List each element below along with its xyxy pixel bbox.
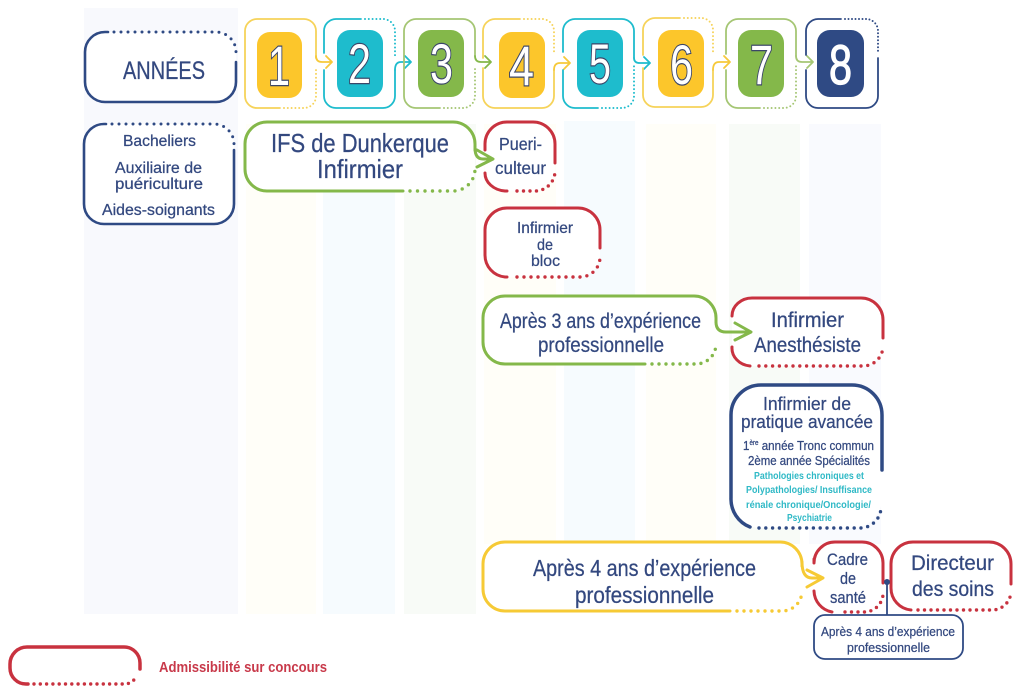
- panel: entry profiles: Bacheliers: [123, 133, 196, 150]
- panel: year 6: 6: [670, 33, 693, 96]
- arrow: year 3 to 4: [475, 56, 491, 68]
- arrow: après 4 ans to cadre de santé: [802, 562, 823, 587]
- legend: [10, 647, 327, 684]
- panel: infirmier de pratique avancée: [731, 385, 882, 528]
- panel: infirmier de pratique avancée: Polypathologies/ Insuffisance: [746, 484, 872, 496]
- arrow: year 1 to 2: [316, 56, 332, 68]
- panel: cadre de santé: de: [840, 569, 856, 588]
- panel: infirmier de pratique avancée: rénale chronique/Oncologie/: [746, 499, 871, 511]
- panel: IFS de Dunkerque: Infirmier: [317, 154, 403, 184]
- panel: year 2: 2: [348, 32, 371, 95]
- panel: après 3 ans: Après 3 ans d’expérience: [500, 310, 701, 333]
- panel: year 3: 3: [430, 32, 453, 95]
- panel: après 3 ans: [483, 296, 716, 364]
- panel: après 4 ans condition: professionnelle: [847, 640, 930, 655]
- panel: year 5: [563, 19, 634, 108]
- background column bands: [84, 8, 881, 614]
- panel: year 1: [245, 19, 316, 108]
- panel: après 4 ans: Après 4 ans d’expérience: [533, 555, 756, 581]
- panel: year 4: 4: [509, 34, 534, 97]
- panel: après 4 ans condition: [814, 615, 963, 659]
- panel: infirmier de pratique avancée: année Tronc commun: [758, 438, 874, 453]
- panel: entry profiles: puériculture: [115, 176, 203, 193]
- panel: infirmier de bloc: de: [537, 237, 553, 254]
- panel: entry profiles: Aides-soignants: [102, 202, 215, 219]
- panel: directeur des soins: Directeur: [911, 551, 994, 575]
- panel: puériculteur: Pueri-: [499, 134, 542, 154]
- panel: year 6: [643, 18, 713, 107]
- panel: cadre de santé: santé: [830, 588, 866, 607]
- panel: années label: [85, 32, 236, 102]
- panel: directeur des soins: des soins: [912, 577, 994, 601]
- arrow: year 5 to 6: [634, 57, 650, 69]
- legend swatch: [10, 647, 140, 684]
- panel: IFS de Dunkerque: IFS de Dunkerque: [271, 128, 449, 158]
- connector: cadre to condition: [884, 579, 890, 616]
- panel: infirmier de pratique avancée: ère: [749, 440, 759, 447]
- panel: infirmier anesthésiste: [732, 298, 883, 366]
- panel: year 4: [483, 19, 554, 108]
- panel: cadre de santé: [814, 542, 883, 612]
- panel: year 7: [726, 19, 796, 108]
- panel: year 3: [404, 19, 475, 108]
- panel: year 5: 5: [589, 32, 611, 95]
- panel: cadre de santé: Cadre: [827, 550, 868, 569]
- arrow: year 4 to 5: [554, 57, 570, 70]
- panel: infirmier de pratique avancée: Psychiatrie: [787, 512, 832, 524]
- panel: puériculteur: culteur: [495, 158, 546, 178]
- panel: puériculteur: [485, 122, 555, 191]
- panel: infirmier de bloc: [485, 208, 600, 277]
- panel: infirmier de pratique avancée: 2ème année Spécialités: [748, 453, 870, 468]
- panel: infirmier de pratique avancée: Infirmier de: [763, 393, 851, 414]
- panel: year 7: 7: [750, 33, 773, 96]
- panel: year 8: [806, 19, 878, 108]
- panel: après 4 ans: professionnelle: [575, 582, 714, 608]
- arrow: IFS to puériculteur: [475, 148, 493, 167]
- panel: year 8: 8: [829, 33, 852, 96]
- panel: infirmier de bloc: bloc: [531, 253, 560, 270]
- arrow: year 2 to 3: [395, 56, 411, 70]
- panel: infirmier de bloc: Infirmier: [517, 220, 574, 237]
- arrow: après 3 ans to anesthésiste: [716, 322, 751, 340]
- panel: infirmier de pratique avancée: pratique avancée: [741, 411, 873, 432]
- panel: entry profiles: Auxiliaire de: [115, 160, 202, 177]
- panel: après 3 ans: professionnelle: [538, 334, 664, 357]
- panel: directeur des soins: [891, 542, 1011, 610]
- panel: infirmier de pratique avancée: 1: [743, 438, 750, 453]
- legend label: Admissibilité sur concours: [159, 659, 327, 676]
- panel: après 4 ans condition: Après 4 ans d’expérience: [821, 624, 955, 639]
- panel: IFS de Dunkerque: [245, 122, 475, 191]
- panel: après 4 ans: [483, 542, 802, 611]
- arrow: year 7 to 8: [796, 56, 813, 68]
- panel: year 2: [324, 19, 395, 108]
- panel: infirmier anesthésiste: Anesthésiste: [754, 334, 861, 357]
- panel: year 1: 1: [268, 34, 290, 97]
- panel: infirmier de pratique avancée: Pathologies chroniques et: [754, 470, 864, 482]
- arrow: year 6 to 7: [713, 56, 730, 70]
- panel: entry profiles: [84, 124, 234, 224]
- panel: infirmier anesthésiste: Infirmier: [771, 309, 844, 332]
- panel: années label: ANNÉES: [123, 56, 205, 85]
